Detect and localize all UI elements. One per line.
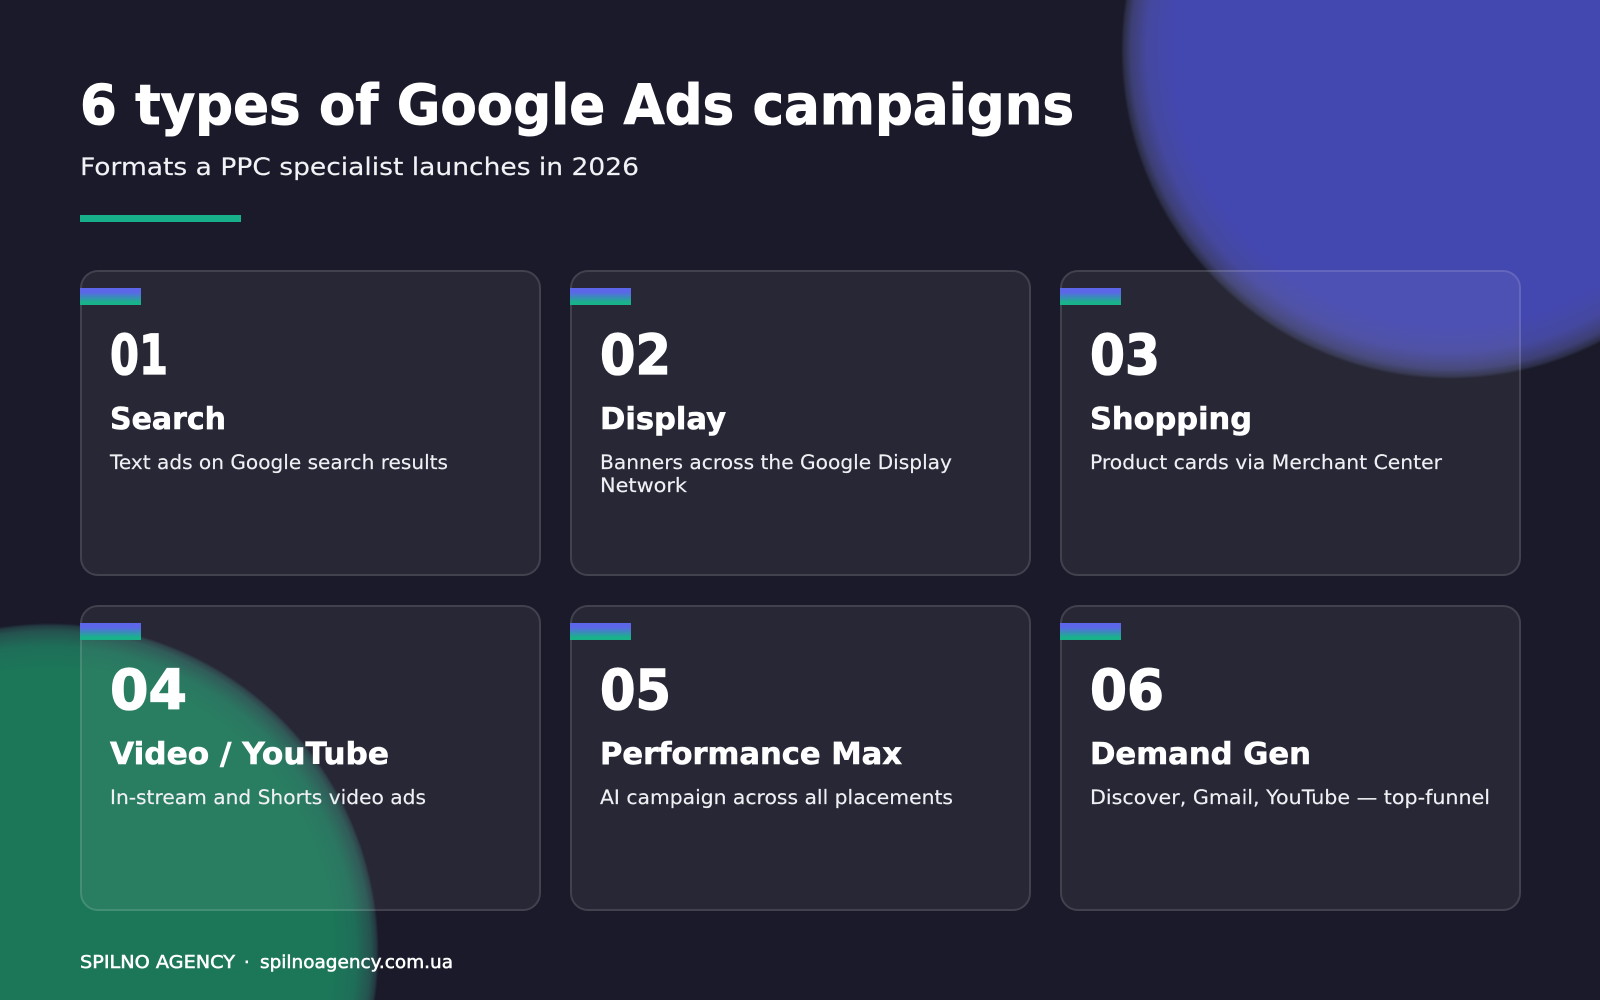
panel: card 02 Display: Display [600,402,726,437]
panel: card 01 Search: Text ads on Google search results [109,451,448,474]
panel: card 04 Video / YouTube [80,605,541,911]
title: 6 types of Google Ads campaigns [80,73,1074,137]
footer: SPILNO AGENCY [80,953,235,973]
panel: card 04 Video / YouTube: Video / YouTube [110,737,389,772]
panel: card 06 Demand Gen: Demand Gen [1090,737,1311,772]
footer: · [244,953,250,973]
panel: card 03 Shopping [1060,270,1521,576]
panel: card 01 Search: Search [110,402,226,437]
panel: card 01 Search: 01 [110,323,168,387]
panel: card 03 Shopping: Product cards via Merchant Center [1090,451,1443,474]
panel: card 05 Performance Max: Performance Max [600,737,902,772]
panel: card 02 Display: Banners across the Google Display [600,451,952,474]
panel: card 02 Display [570,270,1031,576]
panel: card 02 Display: 02 [600,323,671,387]
panel: card 04 Video / YouTube: 04 [110,658,187,722]
footer [80,953,453,973]
panel: card 06 Demand Gen: 06 [1090,658,1164,722]
panel: card 05 Performance Max: 05 [600,658,671,722]
panel: card 04 Video / YouTube: In-stream and Shorts video ads [110,786,426,809]
panel: card 05 Performance Max: AI campaign across all placements [600,786,953,809]
decorative blue circle [1120,0,1600,380]
panel: card 02 Display: Network [600,474,688,497]
panel: card 06 Demand Gen [1060,605,1521,911]
panel: card 03 Shopping: Shopping [1090,402,1252,437]
decorative green circle [0,622,380,1000]
panel: card 06 Demand Gen: Discover, Gmail, YouTube — top-funnel [1090,786,1490,809]
footer: spilnoagency.com.ua [260,953,453,973]
accent divider [80,215,241,222]
panel: card 03 Shopping: 03 [1090,323,1160,387]
subtitle: Formats a PPC specialist launches in 2026 [80,153,639,181]
panel: card 05 Performance Max [570,605,1031,911]
panel: card 01 Search [80,270,541,576]
